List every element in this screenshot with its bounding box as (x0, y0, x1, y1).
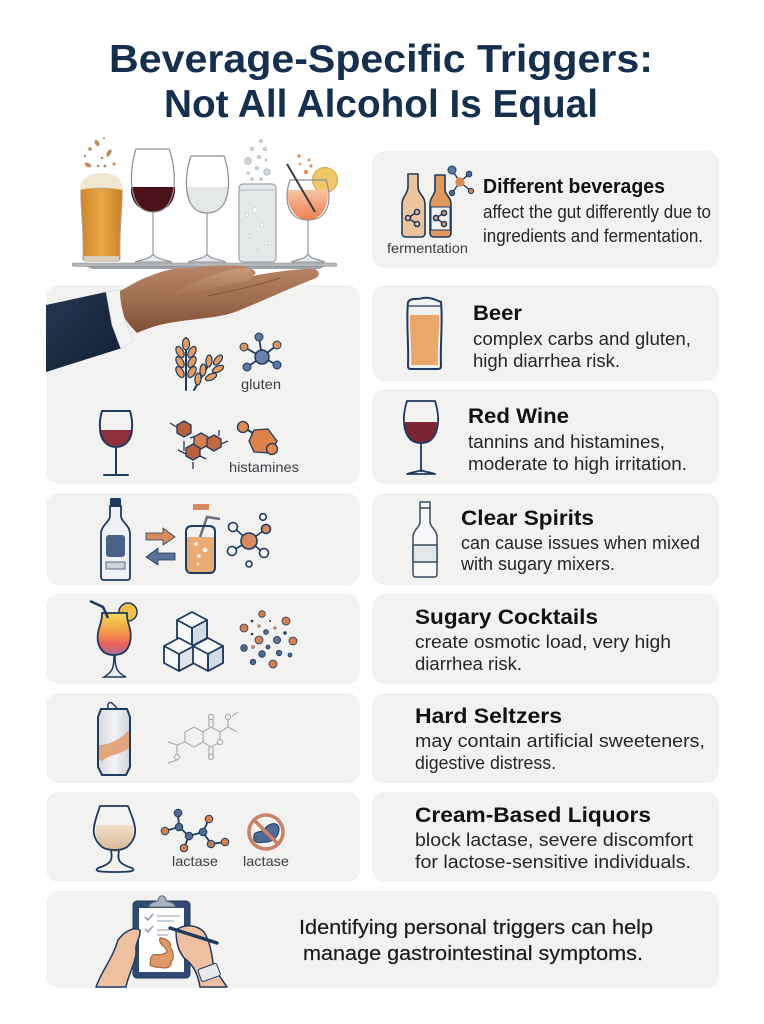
body text: high diarrhea risk. (473, 351, 620, 371)
panel: hard seltzer (46, 693, 360, 783)
heading: Red Wine (468, 404, 569, 428)
icon: sweetener molecule (168, 712, 238, 763)
icon: beer glass (407, 298, 442, 369)
label: lactase blocked: lactase (243, 853, 289, 869)
panel: beer (372, 285, 719, 381)
panel: clear spirits (372, 493, 719, 585)
heading: Clear Spirits (461, 506, 594, 530)
icon: red wine glass (404, 401, 438, 474)
body text: diarrhea risk. (415, 654, 522, 674)
icon: cocktail glass (90, 601, 137, 677)
panel: spirits and mixers (46, 493, 360, 585)
bubbles: cocktail (297, 154, 313, 174)
body text: with sugary mixers. (460, 554, 615, 574)
label: fermentation: fermentation (387, 240, 468, 256)
title: Not All Alcohol Is Equal (164, 83, 598, 126)
drink: beer pint (80, 173, 122, 262)
title: Beverage-Specific Triggers: (109, 38, 653, 81)
drink: spritz cocktail (287, 164, 338, 262)
label: lactase: lactase (172, 853, 218, 869)
heading: Beer (473, 301, 523, 325)
body text (483, 202, 711, 246)
illustration: suit arm and hand (46, 265, 319, 372)
body text: may contain artificial sweeteners, (415, 731, 705, 751)
bubbles: seltzer (245, 140, 270, 180)
tray (72, 263, 337, 269)
body text: create osmotic load, very high (415, 632, 671, 652)
icon: sugar molecule (228, 514, 270, 567)
arrow: right orange (146, 528, 175, 545)
panel: conclusion (46, 891, 719, 988)
label: histamines: histamines (229, 459, 299, 475)
body text: can cause issues when mixed (461, 533, 700, 553)
body text: ingredients and fermentation. (483, 226, 703, 246)
panel: sugary cocktails (372, 594, 719, 684)
icon: histamine blob (238, 422, 278, 454)
title (109, 38, 653, 126)
icon: spirit bottle (101, 498, 130, 580)
icon: seltzer can (98, 703, 130, 775)
heading: Hard Seltzers (415, 704, 562, 728)
body text: block lactase, severe discomfort (415, 830, 693, 850)
body text (473, 329, 691, 371)
panel: red wine (372, 389, 719, 484)
body text: moderate to high irritation. (468, 454, 687, 474)
body text: complex carbs and gluten, (473, 329, 691, 349)
icon: fermentation bottles (402, 174, 451, 237)
panel: cream liquor (46, 792, 360, 882)
label: gluten: gluten (241, 376, 281, 392)
icon: osmotic particles (240, 611, 297, 668)
heading: Different beverages (483, 176, 665, 198)
heading: Cream-Based Liquors (415, 803, 651, 827)
panel: beer and red wine ingredients (46, 285, 360, 484)
panel: sugary cocktail (46, 594, 360, 684)
icon: clear bottle (413, 502, 437, 577)
heading: Sugary Cocktails (415, 605, 598, 629)
arrow: left blue (146, 548, 175, 565)
body text (415, 632, 671, 674)
icon: clipboard with hands (96, 896, 227, 987)
icon: lactase molecule (161, 809, 229, 852)
drink: red wine glass (131, 149, 175, 262)
illustration: serving tray with drinks (72, 137, 338, 269)
drink: seltzer glass (239, 184, 276, 262)
text: conclusion: manage gastrointestinal symptoms. (303, 942, 643, 965)
body text: digestive distress. (415, 753, 556, 773)
text: conclusion (299, 916, 653, 965)
drink: white wine glass (186, 156, 229, 262)
body text (415, 830, 693, 872)
body text (460, 533, 700, 574)
icon: red wine glass (99, 411, 133, 475)
bubbles: grain particles (84, 137, 116, 168)
body text (468, 432, 687, 474)
icon: histamine hex molecule (170, 421, 228, 469)
icon: mixer jar (186, 504, 220, 573)
text: conclusion: Identifying personal triggers can help (299, 916, 653, 939)
icon: gluten molecule (240, 333, 281, 371)
icon: fermentation molecule (448, 166, 474, 196)
body text: for lactose-sensitive individuals. (415, 852, 691, 872)
icon: snifter glass (94, 806, 135, 872)
panel: cream-based liquors (372, 792, 719, 882)
icon: wheat (174, 338, 225, 390)
panel: hard seltzers (372, 693, 719, 783)
body text: affect the gut differently due to (483, 202, 711, 222)
icon: blocked lactase (249, 815, 283, 849)
icon: sugar cubes (164, 612, 223, 671)
body text (415, 731, 705, 773)
body text: tannins and histamines, (468, 432, 665, 452)
panel: intro (372, 151, 719, 268)
